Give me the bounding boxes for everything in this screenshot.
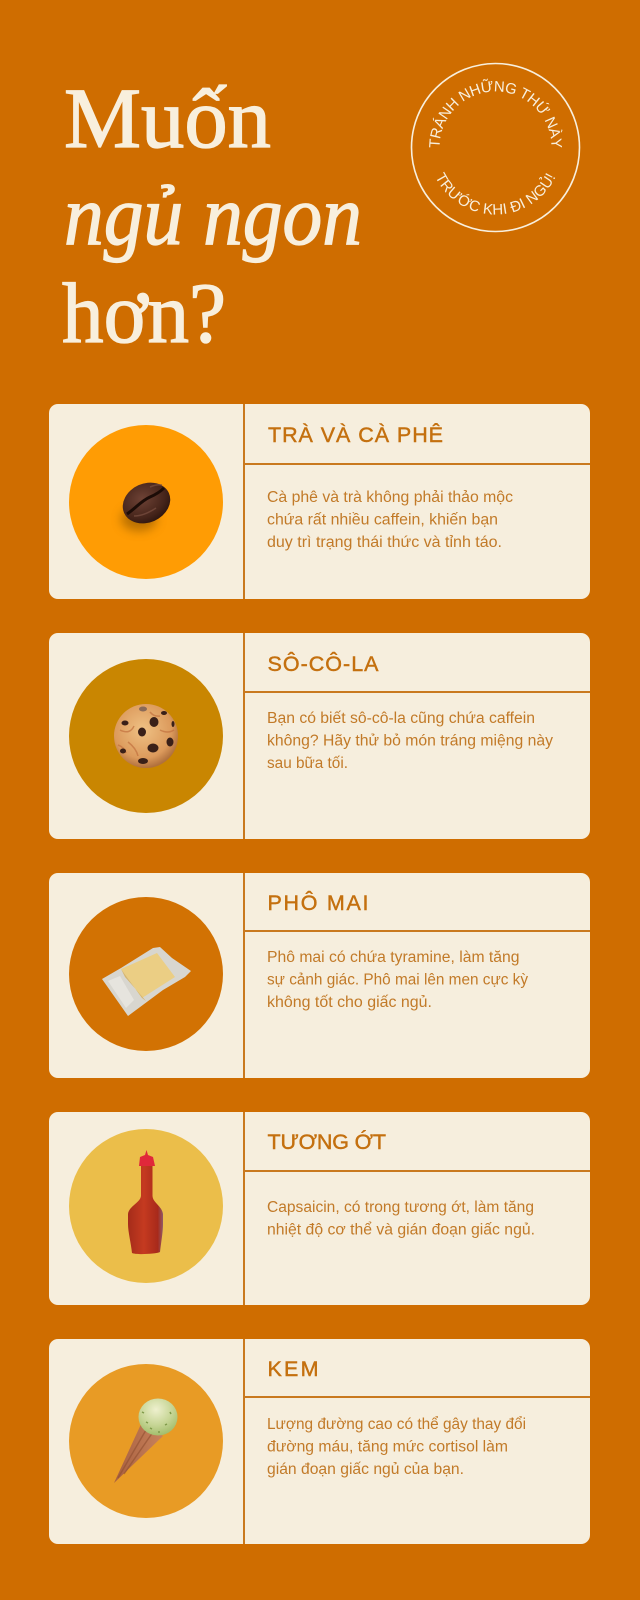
icon: cheese xyxy=(69,897,223,1051)
description: sự cảnh giác. Phô mai lên men cực kỳ xyxy=(267,972,528,988)
panel: trà và cà phê xyxy=(49,404,590,599)
icon: cookie xyxy=(69,659,223,813)
heading: TRÀ VÀ CÀ PHÊ xyxy=(268,422,443,447)
description xyxy=(267,949,528,1011)
icon: ice cream cone xyxy=(69,1364,223,1518)
circular badge xyxy=(410,62,580,232)
description: gián đoạn giấc ngủ của bạn. xyxy=(267,1461,464,1478)
icon: chili sauce bottle xyxy=(69,1129,223,1283)
icon: coffee bean xyxy=(69,425,223,579)
description xyxy=(267,710,553,772)
panel: sô-cô-la xyxy=(49,633,590,839)
panel: phô mai xyxy=(49,873,590,1078)
description: Capsaicin, có trong tương ớt, làm tăng xyxy=(267,1199,534,1216)
circular badge: TRÁNH NHỮNG THỨ NÀY xyxy=(429,78,562,148)
description: duy trì trạng thái thức và tỉnh táo. xyxy=(267,534,502,551)
title: hơn? xyxy=(62,265,226,361)
description: không tốt cho giấc ngủ. xyxy=(267,994,432,1011)
description: Lượng đường cao có thể gây thay đổi xyxy=(267,1416,526,1433)
description: đường máu, tăng mức cortisol làm xyxy=(267,1438,508,1456)
description xyxy=(267,489,513,551)
description: sau bữa tối. xyxy=(267,755,348,772)
description: Bạn có biết sô-cô-la cũng chứa caffein xyxy=(267,710,535,727)
title xyxy=(62,70,362,361)
description: Cà phê và trà không phải thảo mộc xyxy=(267,489,513,506)
description: chứa rất nhiều caffein, khiến bạn xyxy=(267,512,498,528)
description xyxy=(267,1199,535,1238)
heading: KEM xyxy=(268,1357,318,1381)
heading: PHÔ MAI xyxy=(268,890,368,915)
description: không? Hãy thử bỏ món tráng miệng này xyxy=(267,732,553,750)
heading: SÔ-CÔ-LA xyxy=(268,651,379,676)
panel: tương ớt xyxy=(49,1112,590,1305)
panel: kem xyxy=(49,1339,590,1544)
heading: TƯƠNG ỚT xyxy=(268,1129,386,1154)
title: Muốn xyxy=(64,70,271,166)
description: nhiệt độ cơ thể và gián đoạn giấc ngủ. xyxy=(267,1222,535,1238)
title: ngủ ngon xyxy=(64,167,362,263)
description xyxy=(267,1416,526,1478)
description: Phô mai có chứa tyramine, làm tăng xyxy=(267,949,520,966)
circular badge: TRƯỚC KHI ĐI NGỦ! xyxy=(437,172,556,215)
